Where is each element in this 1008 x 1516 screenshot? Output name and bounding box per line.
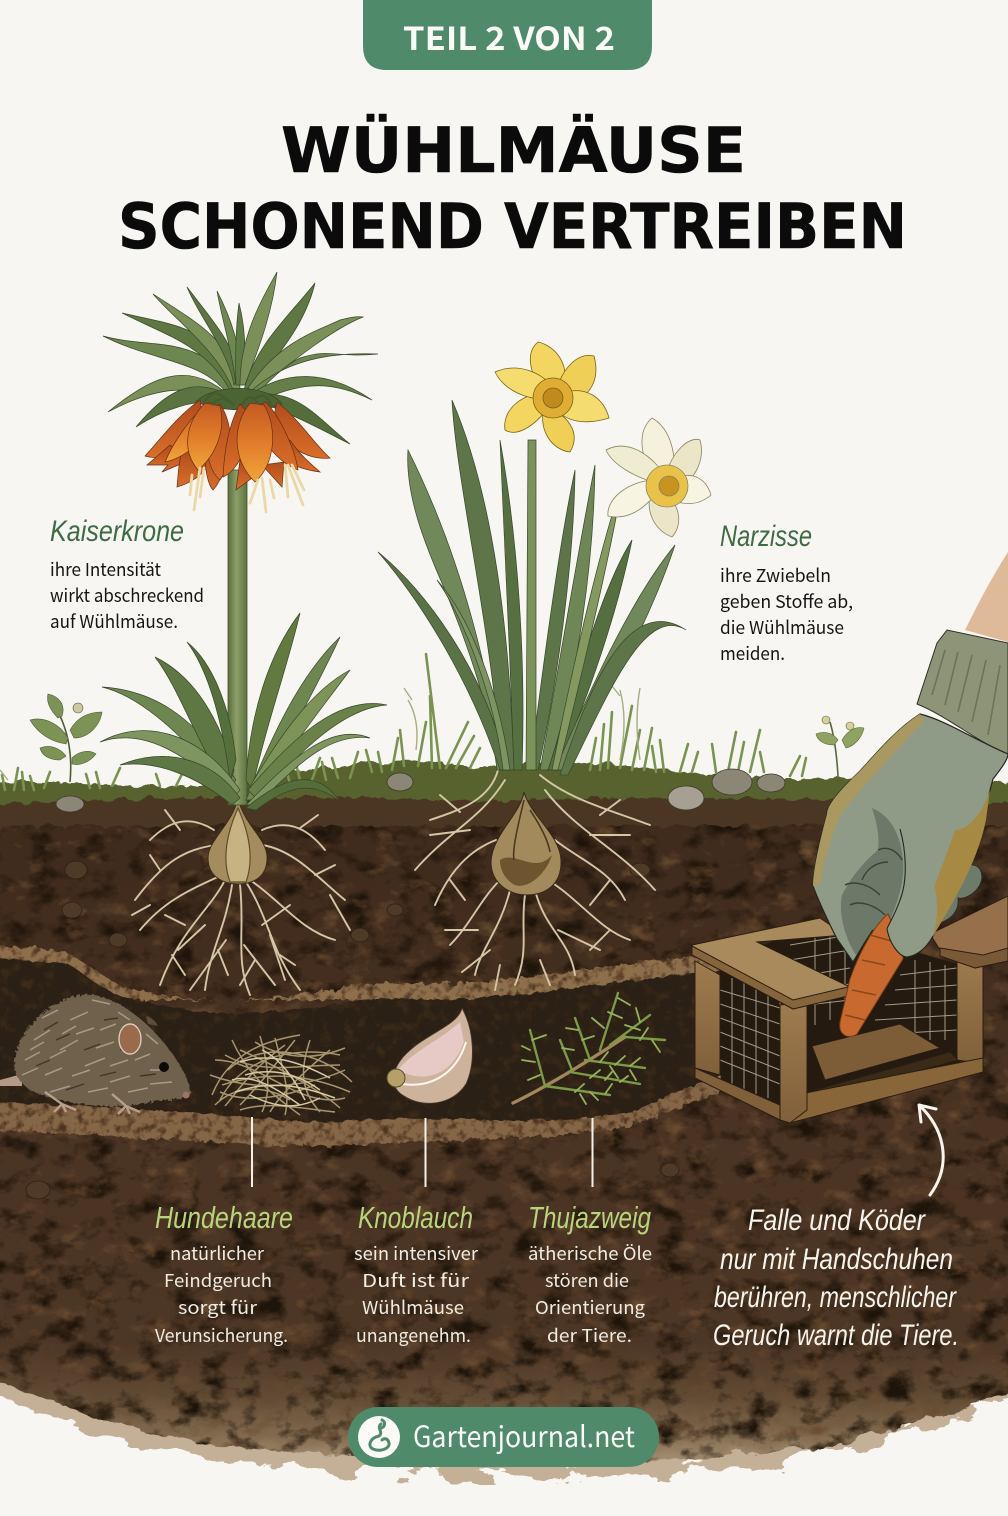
small weed right <box>816 716 864 776</box>
label: Thujazweig: stören die <box>545 1267 629 1293</box>
root plate <box>387 1069 405 1087</box>
tunnel lower crust <box>0 1072 740 1146</box>
part badge: TEIL 2 VON 2 <box>403 14 615 60</box>
title: WÜHLMÄUSE <box>281 114 746 187</box>
lower leaves <box>100 613 387 810</box>
left post <box>695 961 720 1075</box>
stem <box>228 470 247 805</box>
tunnel upper crust <box>0 946 720 1000</box>
title <box>118 114 907 263</box>
label: Hundehaare: sorgt für <box>178 1294 258 1320</box>
label: Hundehaare: Hundehaare <box>155 1200 293 1235</box>
clove <box>394 1008 472 1103</box>
stones <box>56 769 785 812</box>
label: Kaiserkrone: ihre Intensität <box>50 556 161 582</box>
right beam <box>930 896 1008 968</box>
bulb <box>491 792 561 895</box>
carrot <box>840 914 903 1037</box>
glove with carrot <box>813 552 1008 1037</box>
top frame <box>692 918 848 1009</box>
white daffodil <box>606 418 711 537</box>
soil cross-section <box>0 812 1008 1478</box>
label: Thujazweig: der Tiere. <box>547 1322 632 1348</box>
feet <box>45 1092 140 1114</box>
footer badge <box>348 1407 659 1467</box>
left bottom rail <box>695 1068 780 1120</box>
label: Kaiserkrone: Kaiserkrone <box>50 515 184 548</box>
label: Kaiserkrone: wirkt abschreckend <box>50 582 204 608</box>
moss band <box>0 762 1008 824</box>
dog hair tuft <box>210 1035 352 1115</box>
glove tan edge <box>813 714 925 886</box>
roots <box>415 770 655 990</box>
wildflower tufts <box>0 686 640 780</box>
flower stalks <box>204 394 272 408</box>
logo icon <box>358 1416 400 1458</box>
stamens <box>190 465 304 512</box>
label: Knoblauch: sein intensiver <box>354 1240 479 1266</box>
curled fingers shadow <box>841 808 903 955</box>
mouse <box>0 994 190 1114</box>
tan patch <box>918 790 990 941</box>
fur strokes <box>22 1000 172 1092</box>
label: Knoblauch: unangenehm. <box>356 1322 471 1348</box>
finger creases <box>845 848 902 915</box>
flower stem 2 <box>552 515 616 770</box>
callout: gloves note <box>713 1204 959 1352</box>
dark interior <box>720 925 960 1115</box>
label: Thujazweig: Thujazweig <box>528 1200 651 1235</box>
thuja twig <box>513 993 665 1104</box>
label: Narzisse <box>720 520 853 666</box>
floor board <box>812 1024 940 1080</box>
label: Hundehaare: Feindgeruch <box>164 1267 272 1293</box>
yellow daffodil <box>495 342 609 452</box>
tunnel <box>0 946 740 1146</box>
label: Thujazweig: Orientierung <box>535 1294 645 1320</box>
pointer lines <box>252 1117 592 1187</box>
label: Hundehaare: natürlicher <box>170 1240 265 1266</box>
Kaiserkrone plant <box>100 272 387 995</box>
label: Thujazweig: ätherische Öle <box>528 1240 652 1266</box>
back ear <box>146 1016 158 1026</box>
front post <box>780 1002 807 1123</box>
label: Kaiserkrone <box>50 515 204 634</box>
footer badge: Gartenjournal.net <box>413 1414 635 1456</box>
small weed left <box>30 694 102 782</box>
label: Knoblauch: Knoblauch <box>358 1200 473 1235</box>
title: SCHONEND VERTREIBEN <box>118 190 907 263</box>
nose <box>182 1092 190 1098</box>
hand <box>813 714 1008 962</box>
tunnel cavity <box>0 958 720 1122</box>
eye <box>159 1062 169 1072</box>
blossoms <box>145 400 330 490</box>
Narzisse plant <box>378 342 711 990</box>
label: Knoblauch: Duft ist für <box>362 1267 470 1293</box>
garlic clove <box>387 1008 472 1103</box>
callout: gloves note: nur mit Handschuhen <box>720 1243 953 1276</box>
thumb <box>887 829 937 957</box>
crown leaves <box>103 272 378 444</box>
pale wash at lower edge <box>0 1340 1008 1478</box>
ground surface with moss <box>0 654 1008 826</box>
wooden trap <box>692 896 1008 1123</box>
label: Knoblauch: Wühlmäuse <box>362 1294 464 1320</box>
leaves <box>378 400 686 775</box>
label: Narzisse: Narzisse <box>720 520 812 553</box>
right post <box>957 952 983 1064</box>
arrow to trap <box>919 1105 943 1195</box>
roots <box>132 810 350 995</box>
ear <box>119 1024 141 1054</box>
wire mesh back <box>790 928 957 1040</box>
label: Knoblauch <box>354 1200 479 1348</box>
back fingers <box>925 865 982 925</box>
label: Hundehaare: Verunsicherung. <box>155 1322 288 1348</box>
label: Narzisse: ihre Zwiebeln <box>720 562 831 588</box>
thumb edge <box>887 829 933 957</box>
callout: gloves note: Falle und Köder <box>748 1204 926 1237</box>
label: Thujazweig <box>528 1200 652 1348</box>
part badge <box>363 0 652 70</box>
body <box>14 994 190 1106</box>
flower stem 1 <box>526 440 536 770</box>
label: Narzisse: die Wühlmäuse <box>720 614 844 640</box>
bulb <box>208 798 267 884</box>
bottom rail <box>780 1058 983 1123</box>
label: Narzisse: geben Stoffe ab, <box>720 588 853 614</box>
tail <box>0 1074 22 1086</box>
label: Kaiserkrone: auf Wühlmäuse. <box>50 608 178 634</box>
buried stones <box>26 861 679 1199</box>
label: Hundehaare <box>155 1200 293 1348</box>
cuff <box>917 630 1008 755</box>
label: Narzisse: meiden. <box>720 640 785 666</box>
crown base <box>196 388 282 410</box>
wire mesh left <box>720 975 780 1100</box>
arm skin <box>965 552 1008 642</box>
grass blades <box>2 654 806 790</box>
soil body <box>0 812 1008 1465</box>
brown litter strip <box>0 798 1008 826</box>
